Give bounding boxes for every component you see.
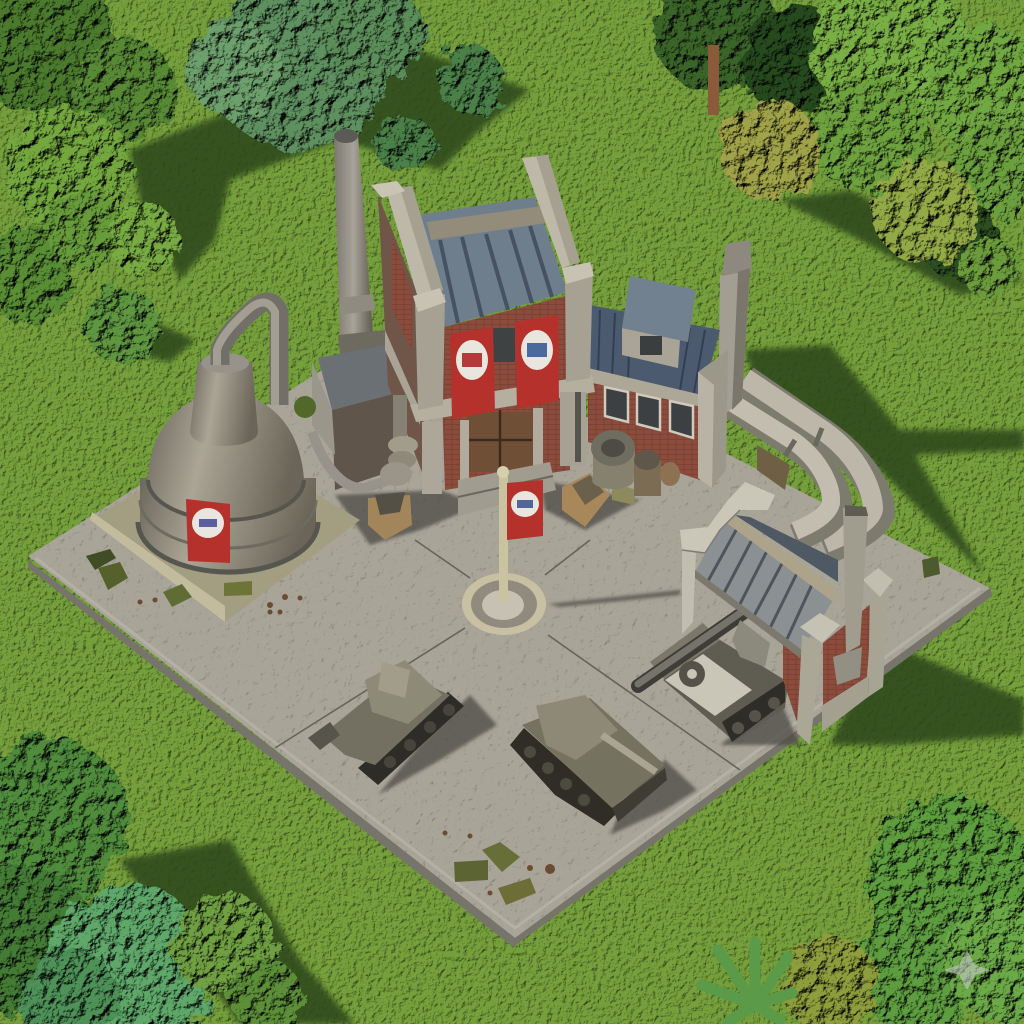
roof <box>418 197 567 328</box>
parapet <box>680 482 775 553</box>
left side wall <box>378 195 425 480</box>
trees bottom left <box>0 736 301 1024</box>
tree trunk <box>708 45 719 115</box>
left brick <box>783 640 802 722</box>
trees top left <box>0 0 504 363</box>
neck <box>190 362 258 446</box>
garage chimney <box>843 508 868 653</box>
tall smokestack <box>334 129 386 372</box>
front pillar <box>797 635 822 745</box>
ledge <box>410 375 595 422</box>
small crate right <box>922 556 940 578</box>
ammo pile left <box>86 549 302 614</box>
ammo pile bottom <box>442 830 555 905</box>
tower chimney back <box>718 240 752 420</box>
door frame columns <box>460 420 469 486</box>
main factory <box>371 155 595 516</box>
pipes to the right <box>728 378 880 550</box>
roof <box>695 514 837 650</box>
concrete pad <box>28 365 992 947</box>
door <box>468 412 532 472</box>
steps <box>458 462 556 516</box>
back roof <box>735 515 838 582</box>
flagpole <box>462 466 546 635</box>
trees bottom right <box>782 796 1024 1024</box>
annex windows <box>605 387 693 438</box>
trees top right <box>653 0 1024 298</box>
side annex building <box>588 276 728 488</box>
front pillars <box>415 294 445 410</box>
supply crates and barrels <box>368 430 790 540</box>
garage building <box>680 482 893 745</box>
right brick wall <box>823 603 872 705</box>
storage tank dome <box>90 302 360 622</box>
tank: left <box>308 660 464 785</box>
pad shadows <box>335 480 800 835</box>
watermark sparkle <box>944 950 990 990</box>
tank: middle <box>510 695 667 826</box>
foundation slab <box>90 440 360 622</box>
banner: tank <box>186 499 230 563</box>
machinery between boiler and factory <box>380 395 418 486</box>
back-left wall <box>682 550 696 634</box>
pad seams <box>275 540 740 770</box>
palm plant <box>702 942 792 1022</box>
right pier <box>868 593 888 697</box>
green shrub <box>294 396 316 418</box>
front wall <box>440 295 570 490</box>
tank: right (in garage) <box>638 611 788 742</box>
banner: left <box>450 327 495 419</box>
parapets <box>386 186 443 298</box>
banner: pole <box>507 480 543 540</box>
boiler lean-to <box>294 345 400 490</box>
annex dormer <box>622 276 696 368</box>
goose-neck pipe <box>220 302 279 405</box>
banner: right <box>515 315 559 409</box>
pipe loop <box>312 432 395 488</box>
